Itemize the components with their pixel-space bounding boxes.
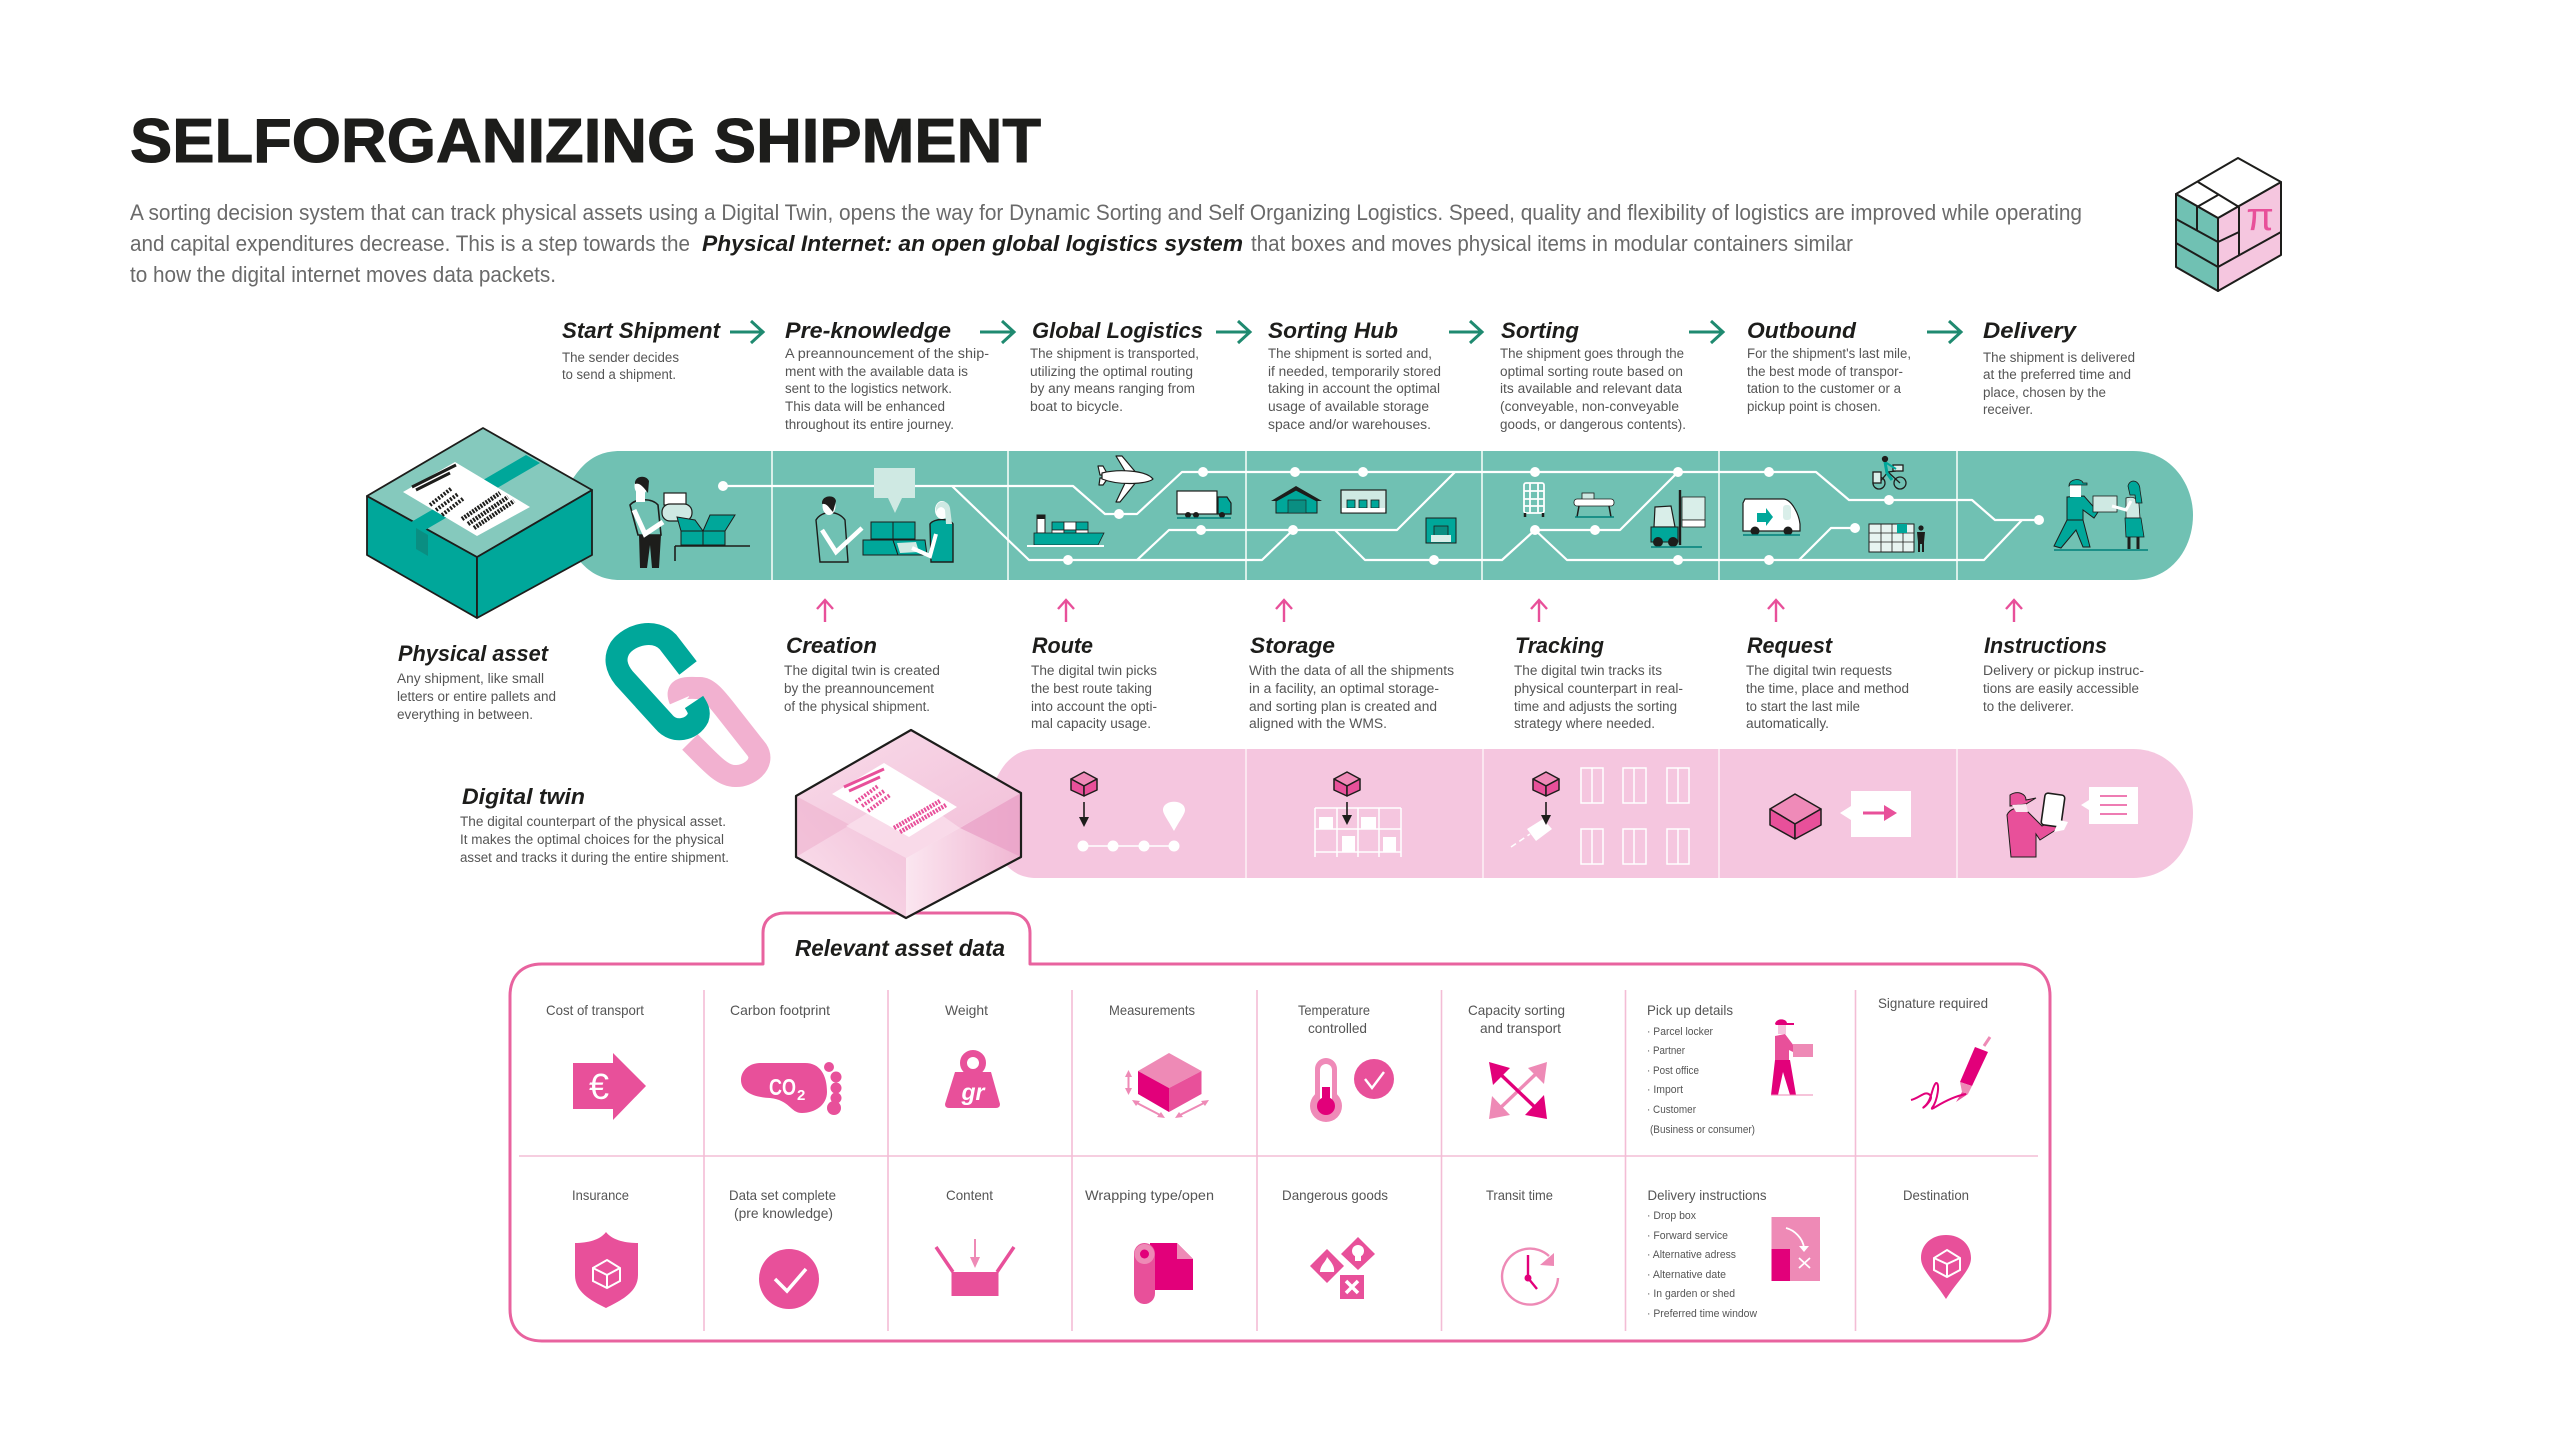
arrow: creation <box>817 600 833 622</box>
step: Sorting Hub: space and/or warehouses. <box>1268 417 1431 432</box>
physical asset text: Any shipment, like small <box>397 671 544 686</box>
tracking text: The digital twin tracks its <box>1514 663 1662 678</box>
cell: insurance <box>572 1187 638 1308</box>
icon: delivery van <box>1743 499 1800 536</box>
request text: automatically. <box>1746 716 1829 731</box>
cell: delivery instructions: Delivery instructions <box>1648 1187 1766 1203</box>
cell: capacity sorting and transport: Capacity sorting <box>1468 1002 1565 1018</box>
cell: capacity sorting and transport: and transport <box>1480 1020 1561 1036</box>
step: Start Shipment <box>562 318 722 382</box>
step: Outbound: For the shipment's last mile, <box>1747 346 1911 361</box>
icon: loading dock <box>1426 518 1456 543</box>
step: Sorting: The shipment goes through the <box>1500 346 1684 361</box>
cell: pick up details: · Customer <box>1647 1104 1696 1116</box>
cell: delivery instructions: · Preferred time window <box>1647 1308 1757 1320</box>
route text: into account the opti- <box>1031 699 1157 714</box>
creation text: of the physical shipment. <box>784 699 930 714</box>
network route lines <box>718 467 2044 565</box>
arrow: request <box>1768 600 1784 622</box>
step: Outbound: the best mode of transpor- <box>1747 364 1903 379</box>
request text: the time, place and method <box>1746 681 1909 696</box>
route text <box>1031 633 1157 731</box>
step: Sorting Hub: Sorting Hub <box>1268 318 1398 343</box>
arrow: tracking <box>1531 600 1547 622</box>
teal physical band <box>556 451 2193 580</box>
step: Outbound: Outbound <box>1747 318 1857 343</box>
step: Delivery: at the preferred time and <box>1983 367 2131 382</box>
arrow: pre-knowledge to global logistics <box>980 321 1014 343</box>
step: Global Logistics <box>1030 318 1203 414</box>
cell: weight: gr <box>960 1079 986 1105</box>
creation text <box>784 633 940 714</box>
step: Sorting: optimal sorting route based on <box>1500 364 1683 379</box>
cell: delivery instructions: · Alternative adress <box>1647 1249 1736 1261</box>
cell: carbon footprint <box>730 1002 842 1115</box>
intro text: A sorting decision system that can track physical assets using a Digital Twin, opens the way for Dynamic Sorting and Self Organizing Logistics. Speed, quality and flexibility of logistics are improved while operating <box>130 200 2082 225</box>
cell: content: Content <box>946 1187 993 1203</box>
digital twin text: asset and tracks it during the entire shipment. <box>460 850 729 865</box>
arrow: outbound to delivery <box>1927 321 1961 343</box>
title: SELFORGANIZING SHIPMENT <box>130 107 1041 176</box>
step: Sorting: (conveyable, non-conveyable <box>1500 399 1679 414</box>
intro text: and capital expenditures decrease. This is a step towards the <box>130 231 690 256</box>
step: Global Logistics: by any means ranging from <box>1030 381 1195 396</box>
tracking text: physical counterpart in real- <box>1514 681 1683 696</box>
instructions text <box>1983 633 2144 714</box>
cell: insurance: Insurance <box>572 1187 629 1203</box>
cell: carbon footprint: CO <box>769 1074 796 1100</box>
cell: carbon footprint: Carbon footprint <box>730 1002 830 1018</box>
step: Start Shipment: The sender decides <box>562 350 679 365</box>
digital twin text: It makes the optimal choices for the physical <box>460 832 724 847</box>
cell: delivery instructions: · Forward service <box>1647 1230 1728 1242</box>
physical asset text <box>397 641 556 722</box>
icon: bike courier <box>1873 456 1906 489</box>
step: Sorting: goods, or dangerous contents). <box>1500 417 1686 432</box>
storage text: aligned with the WMS. <box>1249 716 1387 731</box>
step: Sorting: Sorting <box>1501 318 1580 343</box>
tracking text <box>1514 633 1683 731</box>
cell: temperature controlled <box>1298 1002 1394 1122</box>
intro text: Physical Internet: an open global logistics system <box>702 231 1243 256</box>
cell: data set complete: (pre knowledge) <box>734 1205 833 1221</box>
icon: pre-knowledge people with speech bubble <box>816 468 953 562</box>
intro text: that boxes and moves physical items in modular containers similar <box>1251 231 1853 256</box>
arrow: start to pre-knowledge <box>730 321 763 343</box>
icon: warehouse <box>1271 486 1322 513</box>
arrow: global logistics to sorting hub <box>1216 321 1250 343</box>
relevant asset data panel: Relevant asset data <box>795 935 1005 961</box>
icon: pi modular cube: π <box>2246 195 2274 239</box>
cell: wrapping type/open: Wrapping type/open <box>1085 1187 1214 1203</box>
step: Pre-knowledge: This data will be enhanced <box>785 399 945 414</box>
creation text: by the preannouncement <box>784 681 934 696</box>
route text: the best route taking <box>1031 681 1152 696</box>
arrow: sorting to outbound <box>1689 321 1723 343</box>
digital twin text: Digital twin <box>462 784 585 809</box>
route text: mal capacity usage. <box>1031 716 1151 731</box>
step: Pre-knowledge: ment with the available data is <box>785 364 968 379</box>
icon: pi modular cube <box>2176 158 2281 291</box>
cell: dangerous goods <box>1282 1187 1388 1299</box>
physical asset text: Physical asset <box>398 641 550 666</box>
arrow: route <box>1058 600 1074 622</box>
cell: delivery instructions: · Alternative date <box>1647 1269 1726 1281</box>
step: Outbound: tation to the customer or a <box>1747 381 1901 396</box>
step: Global Logistics: Global Logistics <box>1032 318 1203 343</box>
cell: weight <box>945 1002 1000 1108</box>
digital twin text <box>460 784 729 865</box>
pink digital band <box>985 749 2193 878</box>
step: Delivery <box>1983 318 2135 417</box>
icon: tracking twin <box>1511 768 1689 864</box>
request text: Request <box>1747 633 1834 658</box>
step: Global Logistics: boat to bicycle. <box>1030 399 1123 414</box>
step: Pre-knowledge <box>785 318 989 432</box>
storage text: in a facility, an optimal storage- <box>1249 681 1439 696</box>
step: Sorting: its available and relevant data <box>1500 381 1682 396</box>
request text: to start the last mile <box>1746 699 1860 714</box>
tracking text: time and adjusts the sorting <box>1514 699 1677 714</box>
storage text <box>1249 633 1454 731</box>
step: Pre-knowledge: Pre-knowledge <box>785 318 951 343</box>
instructions text: to the deliverer. <box>1983 699 2074 714</box>
arrow: instructions <box>2006 600 2022 622</box>
icon: digital twin cube <box>796 730 1021 918</box>
cell: destination: Destination <box>1903 1187 1969 1203</box>
icon: instructions twin <box>2007 787 2138 857</box>
cell: delivery instructions: · Drop box <box>1647 1210 1696 1222</box>
step: Sorting Hub <box>1268 318 1441 432</box>
icon: distribution building <box>1341 490 1386 513</box>
cell: signature required <box>1878 995 1990 1109</box>
cell: weight: Weight <box>945 1002 988 1018</box>
cell: delivery instructions <box>1647 1187 1820 1320</box>
cell: wrapping type/open <box>1085 1187 1214 1304</box>
step: Delivery: place, chosen by the <box>1983 385 2106 400</box>
instructions text: Delivery or pickup instruc- <box>1983 663 2144 678</box>
tracking text: Tracking <box>1515 633 1605 658</box>
step: Start Shipment: to send a shipment. <box>562 367 676 382</box>
intro text <box>130 200 2082 287</box>
route text: Route <box>1032 633 1093 658</box>
cell: pick up details: · Import <box>1647 1084 1683 1096</box>
digital twin text: The digital counterpart of the physical asset. <box>460 814 726 829</box>
step: Pre-knowledge: throughout its entire journey. <box>785 417 954 432</box>
step: Start Shipment: Start Shipment <box>562 318 722 343</box>
step: Pre-knowledge: A preannouncement of the ship- <box>785 346 989 361</box>
icon: route twin <box>1071 772 1185 852</box>
cell: content <box>936 1187 1014 1296</box>
cell: signature required: Signature required <box>1878 995 1988 1011</box>
icon: truck <box>1177 491 1231 518</box>
tracking text: strategy where needed. <box>1514 716 1655 731</box>
physical asset text: letters or entire pallets and <box>397 689 556 704</box>
step: Global Logistics: The shipment is transported, <box>1030 346 1199 361</box>
creation text: The digital twin is created <box>784 663 940 678</box>
cell: cost of transport: Cost of transport <box>546 1002 644 1018</box>
cell: transit time <box>1486 1187 1558 1305</box>
step: Sorting <box>1500 318 1686 432</box>
route text: The digital twin picks <box>1031 663 1157 678</box>
cell: temperature controlled: controlled <box>1308 1020 1367 1036</box>
storage text: Storage <box>1250 633 1335 658</box>
step: Global Logistics: utilizing the optimal routing <box>1030 364 1193 379</box>
cell: delivery instructions: · In garden or shed <box>1647 1288 1735 1300</box>
step: Pre-knowledge: sent to the logistics network. <box>785 381 952 396</box>
storage text: With the data of all the shipments <box>1249 663 1454 678</box>
physical asset text: everything in between. <box>397 707 533 722</box>
icon: storage twin <box>1315 772 1401 857</box>
step: Sorting Hub: The shipment is sorted and, <box>1268 346 1432 361</box>
cell: capacity sorting and transport <box>1468 1002 1565 1119</box>
step: Sorting Hub: taking in account the optimal <box>1268 381 1440 396</box>
creation text: Creation <box>786 633 877 658</box>
icon: chain link <box>617 634 759 776</box>
cell: dangerous goods: Dangerous goods <box>1282 1187 1388 1203</box>
step: Outbound <box>1747 318 1911 414</box>
cell: cost of transport <box>546 1002 646 1120</box>
icon: forklift <box>1651 490 1705 547</box>
arrow: storage <box>1276 600 1292 622</box>
cell: destination <box>1903 1187 1971 1299</box>
request text: The digital twin requests <box>1746 663 1892 678</box>
icon: request twin <box>1770 791 1911 839</box>
icon: roll cage <box>1524 483 1544 517</box>
step: Sorting Hub: usage of available storage <box>1268 399 1429 414</box>
storage text: and sorting plan is created and <box>1249 699 1437 714</box>
icon: physical asset box <box>367 428 592 618</box>
instructions text: tions are easily accessible <box>1983 681 2139 696</box>
icon: airplane <box>1098 456 1153 502</box>
cell: cost of transport: € <box>589 1066 609 1107</box>
icon: person packing box <box>630 477 750 568</box>
step: Delivery: receiver. <box>1983 402 2033 417</box>
intro text: to how the digital internet moves data packets. <box>130 262 556 287</box>
step: Delivery: Delivery <box>1983 318 2078 343</box>
cell: data set complete: Data set complete <box>729 1187 836 1203</box>
cell: pick up details: · Partner <box>1647 1045 1685 1057</box>
cell: pick up details: · Post office <box>1647 1065 1699 1077</box>
request text <box>1746 633 1909 731</box>
icon: parcel locker <box>1869 524 1925 552</box>
step: Delivery: The shipment is delivered <box>1983 350 2135 365</box>
cell: measurements <box>1109 1002 1209 1118</box>
relevant asset data panel <box>510 913 2050 1341</box>
cell: pick up details <box>1647 1002 1813 1136</box>
cell: carbon footprint: 2 <box>797 1087 805 1104</box>
cell: temperature controlled: Temperature <box>1298 1002 1370 1018</box>
cell: pick up details: Pick up details <box>1647 1002 1733 1018</box>
arrow: sorting hub to sorting <box>1449 321 1482 343</box>
cell: measurements: Measurements <box>1109 1002 1195 1018</box>
icon: delivery handover people <box>2054 480 2148 550</box>
cell: data set complete <box>729 1187 836 1309</box>
icon: conveyor <box>1574 493 1614 517</box>
cell: pick up details: · Parcel locker <box>1647 1026 1713 1038</box>
step: Sorting Hub: if needed, temporarily stored <box>1268 364 1441 379</box>
cell: pick up details: (Business or consumer) <box>1650 1124 1755 1136</box>
step: Outbound: pickup point is chosen. <box>1747 399 1881 414</box>
cell: transit time: Transit time <box>1486 1187 1553 1203</box>
instructions text: Instructions <box>1984 633 2107 658</box>
icon: container ship <box>1027 515 1104 546</box>
